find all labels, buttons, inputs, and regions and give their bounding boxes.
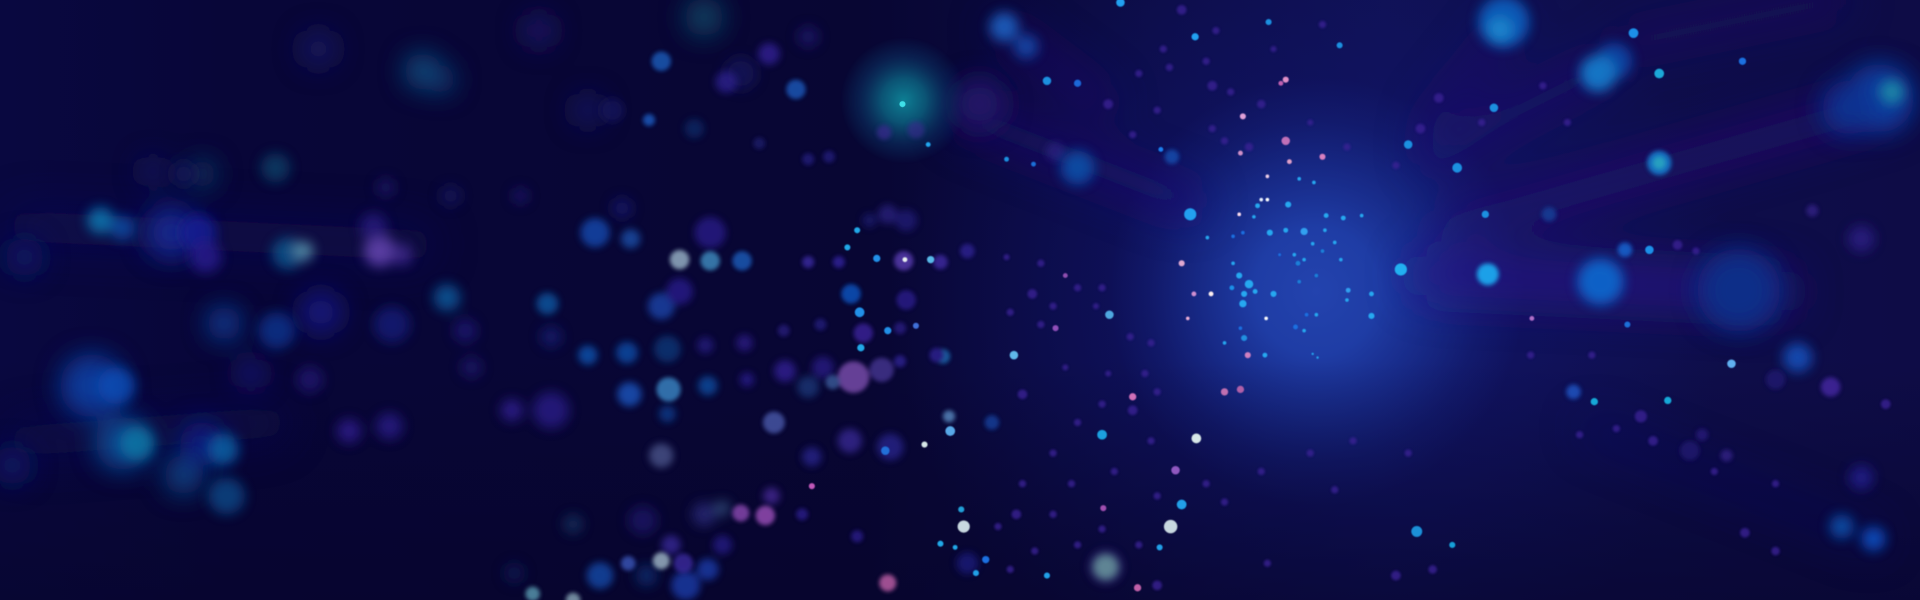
- dim purple particles: [994, 5, 1891, 590]
- teal glow orb: [840, 37, 967, 164]
- small blurred orbs right: [1477, 151, 1840, 462]
- sharp white and pink dots: [809, 77, 1534, 591]
- bright blurred orbs right: [989, 0, 1904, 551]
- soft bokeh left: [87, 26, 819, 587]
- central blue glow: [1108, 77, 1524, 506]
- central cyan dot cluster: [1206, 177, 1374, 359]
- bright bokeh bottom centre: [1087, 549, 1124, 585]
- sharp dots blue: [844, 0, 1746, 579]
- brighter small bokeh left: [525, 51, 1179, 600]
- mid-blur bokeh centre-left: [536, 43, 1065, 600]
